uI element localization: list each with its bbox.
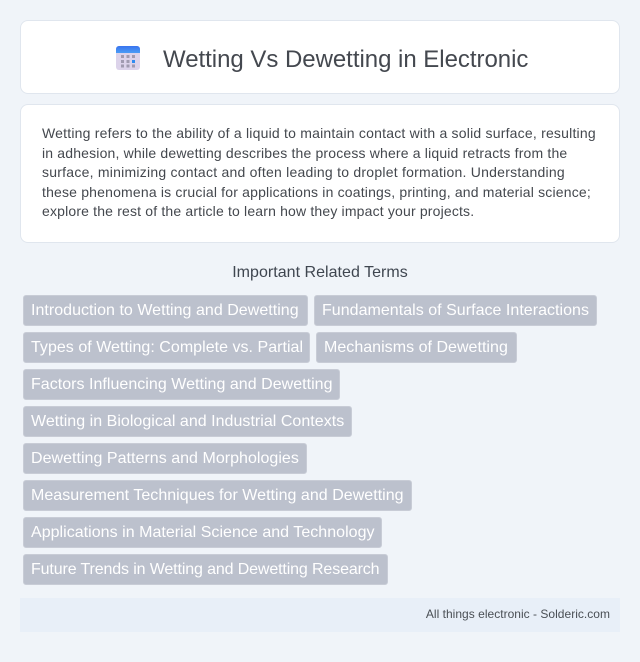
tag [23,332,310,363]
title: Wetting Vs Dewetting in Electronic [163,46,528,72]
description text: Wetting refers to the ability of a liquid to maintain contact with a solid surface, resulting [42,125,596,141]
tag: Fundamentals of Surface Interactions [322,302,589,319]
description text: these phenomena is crucial for applications in coatings, printing, and material science; [42,184,591,200]
description text: surface, minimizing contact and often leading to droplet formation. Understanding [42,164,565,180]
tag [314,295,597,326]
tag: Introduction to Wetting and Dewetting [31,302,299,319]
tag [23,480,412,511]
tag [23,406,352,437]
tag [316,332,517,363]
footer text: All things electronic - Solderic.com [426,607,610,621]
tag list [23,295,597,585]
footer [20,598,620,632]
tag [23,369,340,400]
description text: explore the rest of the article to learn how they impact your projects. [42,203,474,219]
tag: Factors Influencing Wetting and Dewetting [31,376,333,393]
heading: related terms: Important Related Terms [232,264,408,281]
tag [23,295,308,326]
description text [42,125,596,219]
title card [20,20,620,94]
description text: in adhesion, while dewetting describes the process where a liquid retracts from the [42,145,567,161]
tag [23,554,388,585]
tag: Measurement Techniques for Wetting and Dewetting [31,487,404,504]
tag: Applications in Material Science and Technology [31,524,375,541]
icon: calendar grid [116,46,140,70]
panel: description [20,104,620,243]
tag: Types of Wetting: Complete vs. Partial [31,339,303,356]
tag [23,517,382,548]
tag: Wetting in Biological and Industrial Contexts [31,413,344,430]
tag [23,443,307,474]
tag: Mechanisms of Dewetting [324,339,508,356]
tag: Future Trends in Wetting and Dewetting Research [31,561,379,578]
tag: Dewetting Patterns and Morphologies [31,450,299,467]
